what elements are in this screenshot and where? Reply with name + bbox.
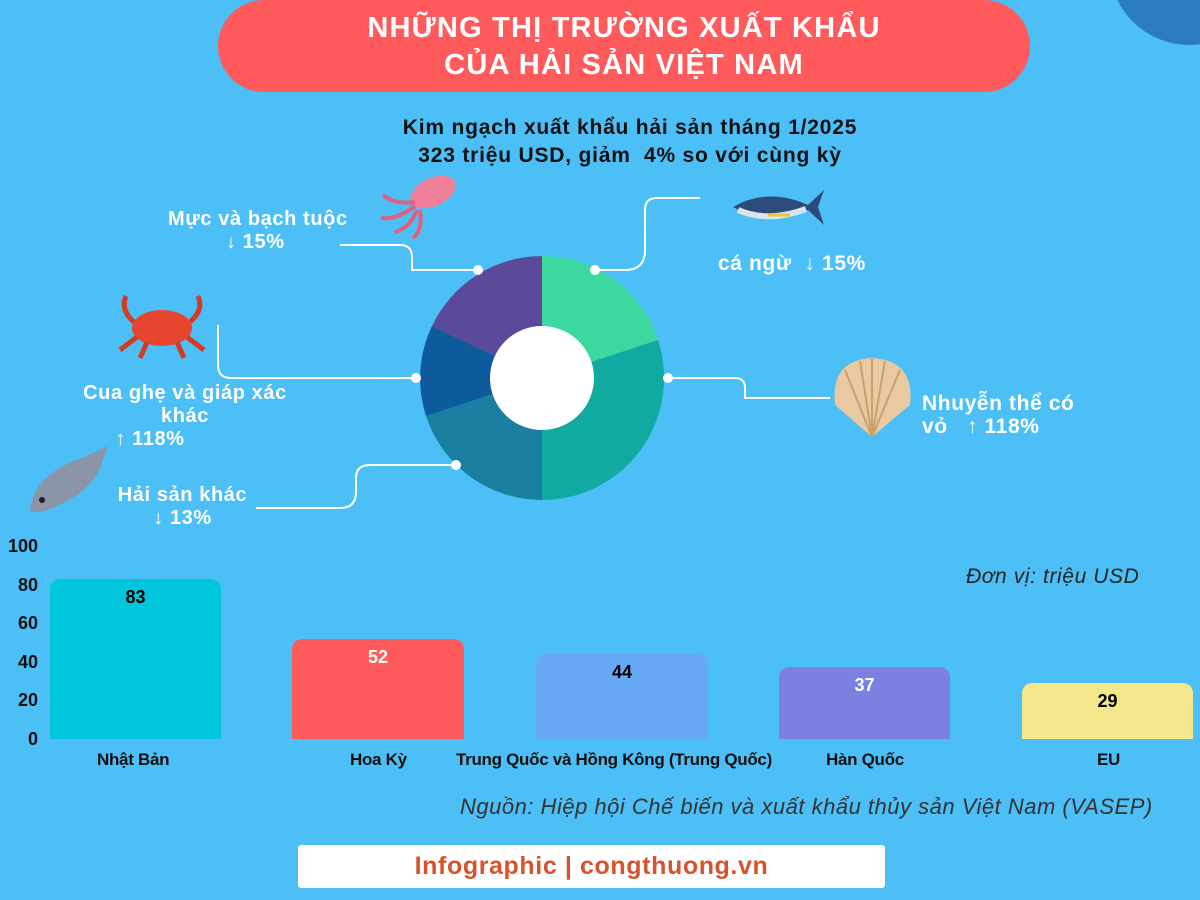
- label: other seafood: ↓ 13%: [153, 507, 212, 529]
- bar chart: 83: [125, 587, 146, 607]
- label: crab: khác: [161, 405, 209, 427]
- bar chart: 37: [854, 675, 875, 695]
- text: Hoa Kỳ: [350, 750, 407, 769]
- label: scallop: [922, 390, 1074, 438]
- donut chart with leader lines: [217, 197, 830, 509]
- x labels: Nhật Bản: [97, 750, 169, 769]
- text: Trung Quốc và Hồng Kông (Trung Quốc): [456, 750, 772, 769]
- icon: scallop: [834, 358, 910, 438]
- label: other seafood: [118, 484, 247, 529]
- bar chart: 80: [18, 575, 38, 595]
- title: CỦA HẢI SẢN VIỆT NAM: [444, 49, 804, 81]
- icon: fish: [30, 446, 108, 512]
- bar chart: 60: [18, 613, 38, 633]
- bar chart: 40: [18, 652, 38, 672]
- label: other seafood: Hải sản khác: [118, 484, 247, 506]
- bar chart: 52: [368, 647, 388, 667]
- label: squid: ↓ 15%: [226, 231, 285, 253]
- footer: Infographic | congthuong.vn: [415, 852, 768, 880]
- title: NHỮNG THỊ TRƯỜNG XUẤT KHẨU: [367, 12, 881, 44]
- subtitle: [403, 116, 857, 167]
- bar chart: 20: [18, 690, 38, 710]
- label: crab: ↑ 118%: [115, 428, 185, 450]
- bar chart: 44: [612, 662, 632, 682]
- label: crab: Cua ghẹ và giáp xác: [83, 382, 287, 404]
- label: crab: [83, 382, 287, 450]
- label: scallop: vỏ ↑ 118%: [922, 415, 1040, 438]
- subtitle: Kim ngạch xuất khẩu hải sản tháng 1/2025: [403, 116, 857, 139]
- source: Nguồn: Hiệp hội Chế biến và xuất khẩu thủy sản Việt Nam (VASEP): [460, 794, 1153, 819]
- bar chart: [8, 536, 1193, 749]
- icon: squid: [380, 176, 456, 240]
- bar chart: 29: [1097, 691, 1118, 711]
- label: tuna: cá ngừ ↓ 15%: [718, 252, 866, 275]
- footer: [298, 845, 885, 888]
- bar chart: 0: [28, 729, 38, 749]
- subtitle: 323 triệu USD, giảm 4% so với cùng kỳ: [418, 144, 842, 167]
- icon: tuna: [733, 190, 824, 225]
- unit note: Đơn vị: triệu USD: [966, 565, 1139, 588]
- text: EU: [1097, 750, 1120, 769]
- text: Hàn Quốc: [826, 750, 904, 769]
- title: [218, 0, 1030, 92]
- label: squid: Mực và bạch tuộc: [168, 208, 348, 230]
- label: squid: [168, 208, 348, 253]
- label: scallop: Nhuyễn thể có: [922, 392, 1074, 415]
- bar chart: 100: [8, 536, 38, 556]
- icon: crab: [118, 295, 206, 359]
- decorative circle top right: [1110, 0, 1200, 45]
